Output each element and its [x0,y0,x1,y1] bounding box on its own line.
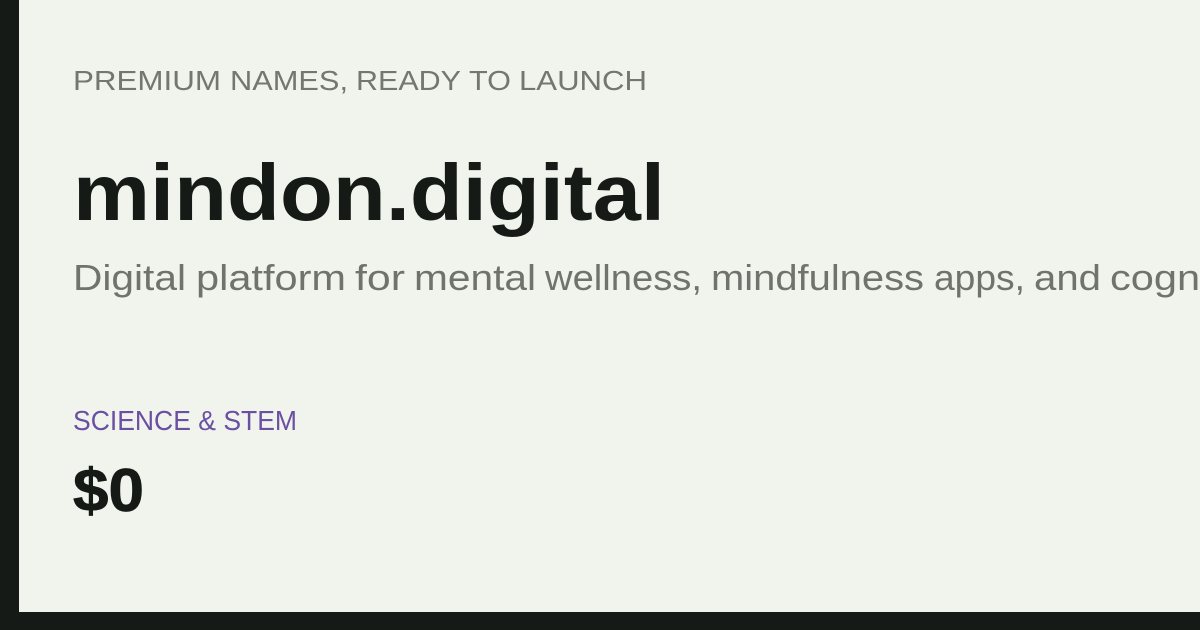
eyebrow text [73,65,647,96]
description text: and [1034,257,1101,298]
eyebrow text: NAMES, [230,65,348,96]
price: $0 [73,457,144,524]
description text: mindfulness [711,257,924,298]
category label: SCIENCE & STEM [73,405,297,436]
heading: domain name: mindon.digital [73,148,665,237]
description text [73,257,1200,298]
eyebrow text: READY [356,65,461,96]
description text: for [355,257,405,298]
eyebrow text: LAUNCH [519,65,647,96]
eyebrow text: TO [469,65,511,96]
eyebrow text: PREMIUM [73,65,221,96]
description text: Digital [73,257,186,298]
description text: platform [196,257,346,298]
description text: wellness, [544,257,702,298]
description text: mental [414,257,536,298]
description text: apps, [934,257,1025,298]
